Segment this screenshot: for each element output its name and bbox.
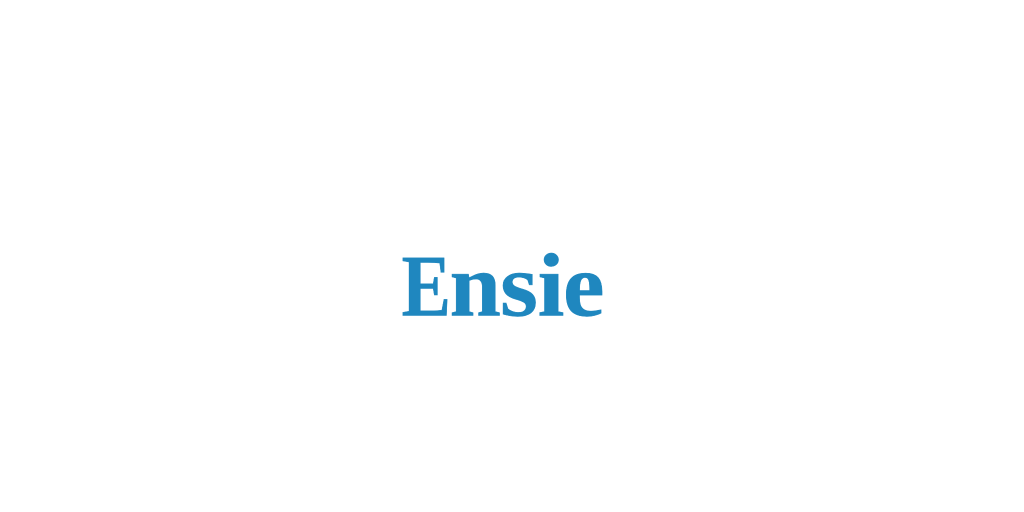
logo: Ensie wordmark: E — [402, 238, 451, 336]
logo: Ensie wordmark: e — [563, 234, 604, 336]
logo: Ensie wordmark: n — [450, 234, 501, 336]
logo: Ensie wordmark: s — [500, 234, 538, 336]
logo: Ensie wordmark: i — [538, 234, 564, 336]
